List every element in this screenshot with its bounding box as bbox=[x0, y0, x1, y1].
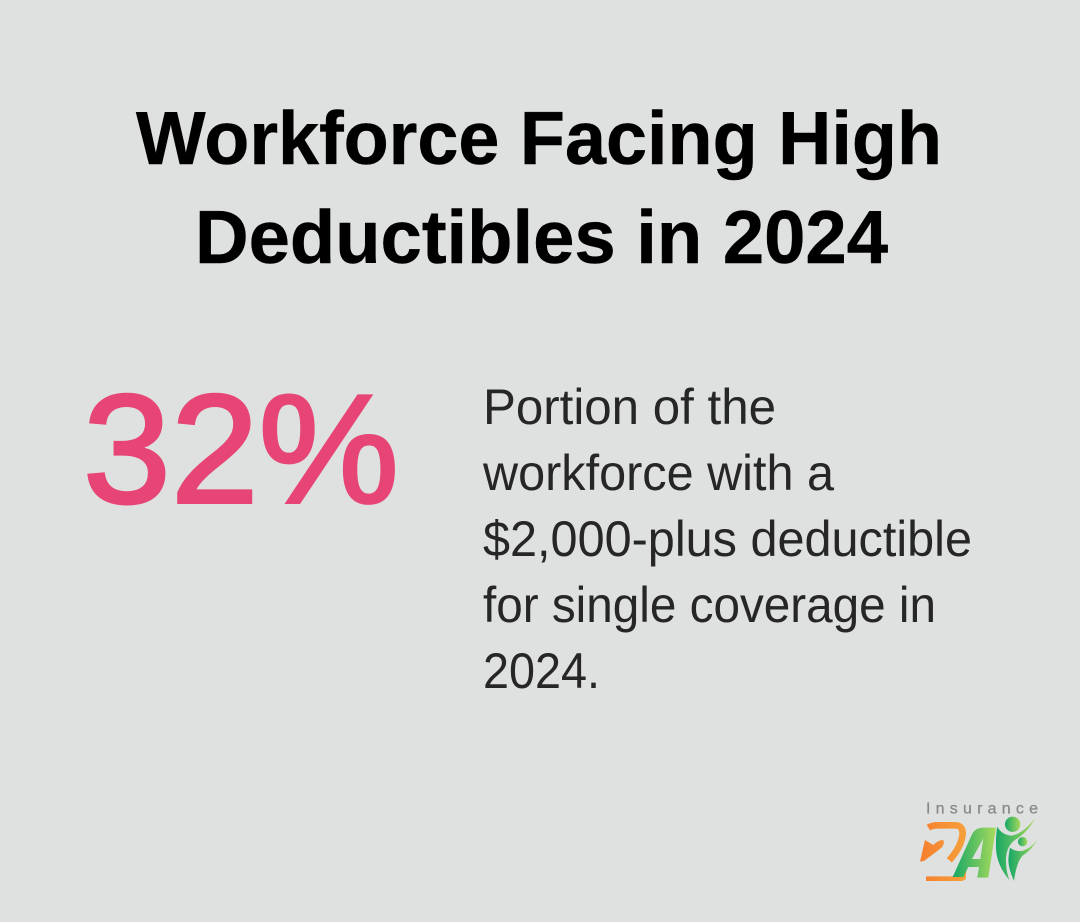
description text bbox=[482, 379, 972, 699]
description text: 2024. bbox=[483, 643, 600, 699]
logo icon: large figure bbox=[996, 817, 1035, 880]
description text: workforce with a bbox=[482, 445, 834, 501]
description text: $2,000-plus deductible bbox=[483, 511, 972, 567]
big statistic: 32%: 32% bbox=[83, 362, 399, 536]
title: Deductibles in 2024 bbox=[195, 195, 888, 279]
logo wordmark: Insurance bbox=[926, 800, 1038, 818]
logo icon: orange arrow bbox=[920, 840, 944, 862]
logo icon: orange 2 bbox=[926, 825, 965, 880]
title bbox=[136, 96, 942, 279]
description text: Portion of the bbox=[483, 379, 776, 435]
description text: for single coverage in bbox=[483, 577, 936, 633]
title: Workforce Facing High bbox=[136, 96, 942, 180]
logo icon group bbox=[920, 817, 1038, 881]
logo icon: green A bbox=[953, 828, 996, 878]
logo icon: small figure bbox=[1008, 837, 1038, 881]
logo: Insurance 2A bbox=[920, 800, 1038, 881]
